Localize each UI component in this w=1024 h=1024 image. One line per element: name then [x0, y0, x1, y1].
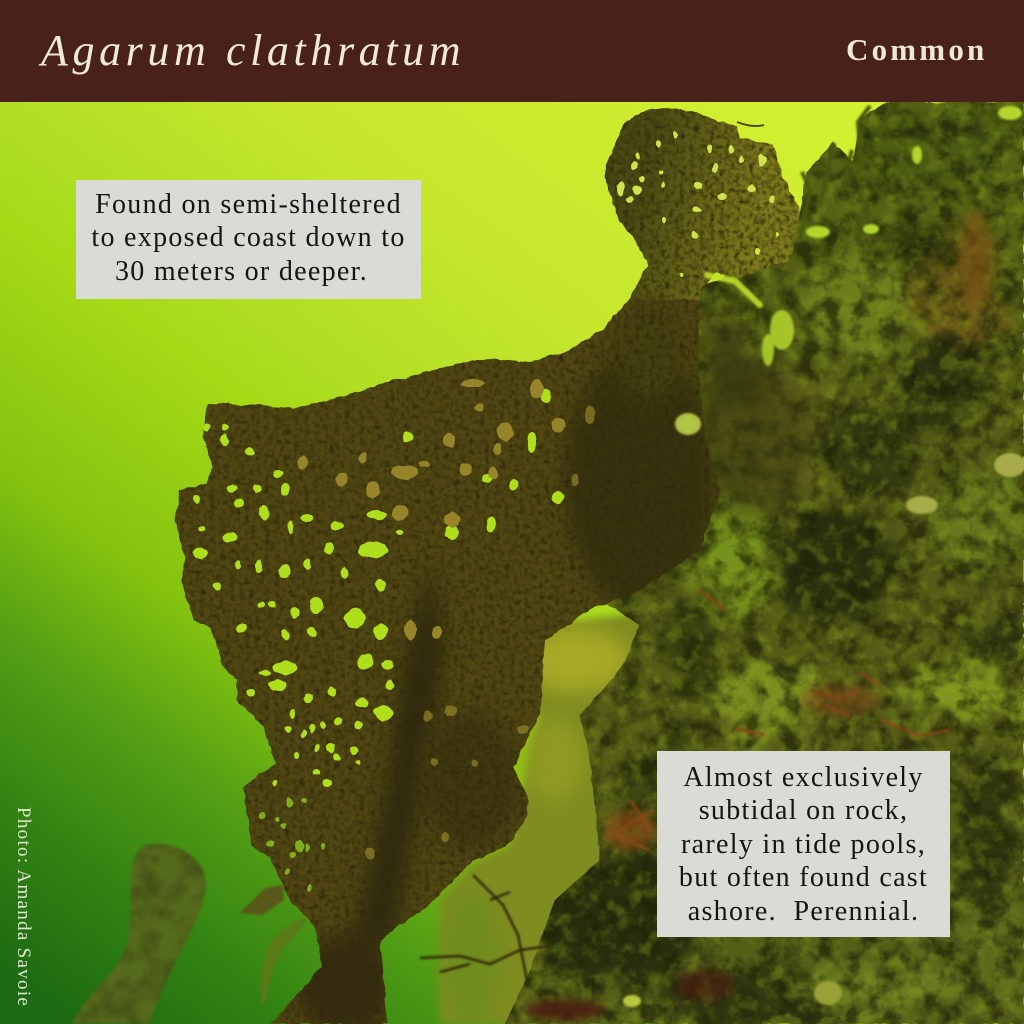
status label: Common — [846, 32, 987, 67]
callout: zonation and lifespan: Almost exclusively — [683, 762, 924, 793]
red algae patches — [605, 590, 950, 850]
green perforations — [192, 389, 564, 787]
pale kelp behind foreground blade — [440, 610, 660, 1024]
callout: zonation and lifespan: but often found cast — [679, 862, 928, 893]
pale bulb on the wall — [675, 413, 701, 435]
photo credit: Photo: Amanda Savoie — [13, 807, 34, 1007]
dim lower perforations — [259, 797, 325, 892]
shaded weeds beside the blade — [690, 360, 810, 520]
water gaps through the weeds — [806, 106, 1022, 238]
dark weeds in the gap — [708, 310, 770, 410]
callout: habitat range: 30 meters or deeper. — [115, 256, 368, 287]
callout: zonation and lifespan — [657, 751, 950, 937]
callout: zonation and lifespan: subtidal on rock, — [699, 795, 908, 826]
feathery weed tips against the water — [778, 104, 892, 260]
kelp blade — [170, 100, 810, 1024]
tan perforations over pale kelp — [298, 379, 595, 859]
pebbles and pale shells — [623, 453, 1024, 1007]
callout: habitat range: to exposed coast down to — [91, 222, 406, 253]
title: Agarum clathratum — [41, 26, 465, 75]
callout: habitat range: Found on semi-sheltered — [95, 189, 402, 220]
callout: zonation and lifespan: rarely in tide pools, — [681, 829, 926, 860]
distant kelp silhouette — [72, 842, 308, 1024]
upper lobe perforations — [617, 131, 779, 277]
frayed lobe tip — [737, 122, 764, 126]
callout: zonation and lifespan: ashore. Perennial. — [688, 896, 919, 927]
dark branching weeds at wall base — [420, 875, 550, 985]
callout: habitat range — [76, 180, 421, 299]
bright gap beneath lobe — [707, 275, 794, 366]
rocky wall with seaweed — [420, 102, 1024, 1024]
header bar — [0, 0, 1024, 102]
side frond — [240, 885, 284, 915]
